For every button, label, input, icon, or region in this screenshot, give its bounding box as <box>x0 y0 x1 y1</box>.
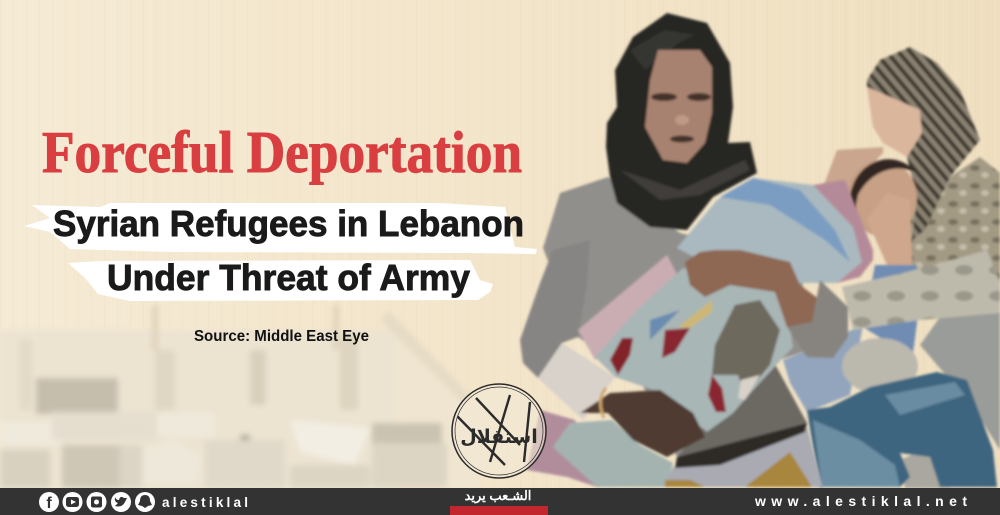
pink blanket edge top <box>578 255 690 360</box>
pale knee <box>842 338 918 394</box>
hijab <box>867 47 980 240</box>
blue shirt <box>783 325 863 412</box>
handle: alestiklal <box>162 495 248 510</box>
left arm sweater <box>520 240 590 378</box>
main woman holding baby <box>520 13 873 487</box>
woman's face <box>867 87 922 157</box>
bracelet <box>600 388 606 418</box>
blanket lower fold <box>553 420 673 487</box>
white brush strip 2 <box>68 260 493 301</box>
bottom hand <box>580 390 705 457</box>
logo seal <box>452 384 546 478</box>
red tab <box>450 506 548 515</box>
footer bar <box>0 488 1000 515</box>
second woman with girl <box>783 47 1000 488</box>
girl's hand <box>867 193 912 265</box>
icon: facebook: f <box>46 495 52 512</box>
gray jeans <box>920 300 1000 450</box>
source: Source: Middle East Eye <box>194 328 369 345</box>
raised hand <box>822 147 883 207</box>
jacket <box>900 157 1000 290</box>
blanket patterns <box>712 300 780 395</box>
cushion <box>900 440 950 488</box>
icon: snapchat <box>135 492 155 512</box>
eyes and mouth <box>651 93 711 142</box>
blurred rubble photo <box>0 305 480 490</box>
girl's head <box>847 160 917 236</box>
icon: twitter <box>111 492 131 512</box>
subtitle line 1: Syrian Refugees in Lebanon <box>53 203 524 244</box>
title: Forceful Deportation <box>42 119 522 185</box>
jacket sleeve <box>842 250 1000 330</box>
white brush strip 1 <box>24 203 537 254</box>
logo seal: استقلال <box>460 426 538 448</box>
top hand and forearm <box>685 250 820 327</box>
subtitle line 2: Under Threat of Army <box>107 257 470 298</box>
website: www.alestiklal.net <box>754 493 967 509</box>
blue shirt top <box>863 265 917 353</box>
blue jeans <box>807 372 997 487</box>
pink blanket edge bottom <box>527 410 597 487</box>
face <box>645 50 712 163</box>
blanket body <box>595 268 793 432</box>
social icons <box>39 492 155 512</box>
icon: instagram <box>86 492 106 512</box>
arabic slogan: الشـعب يريد <box>465 488 531 504</box>
lower shirt <box>677 355 807 457</box>
white cuff <box>538 343 615 420</box>
torso <box>543 177 810 457</box>
black hijab <box>606 13 757 230</box>
icon: youtube <box>62 492 82 512</box>
skirt <box>665 427 823 487</box>
blanket top <box>677 178 862 283</box>
right sleeve <box>787 280 848 358</box>
